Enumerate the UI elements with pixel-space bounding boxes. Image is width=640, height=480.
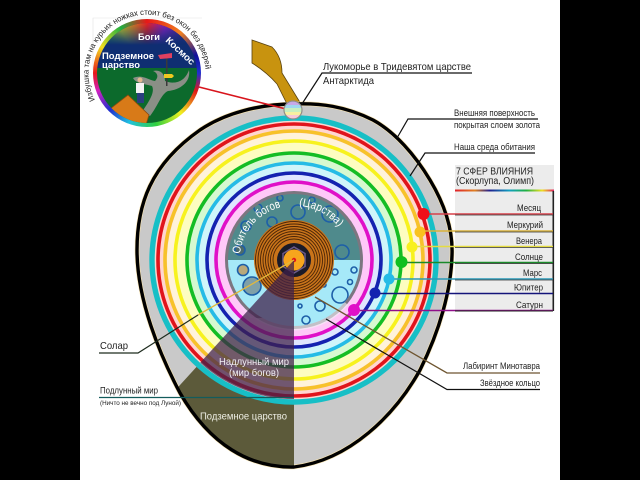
habitat callout: Наша среда обитания (454, 142, 535, 152)
curved disc caption: (Царства) (300, 198, 344, 227)
gray tree (133, 70, 189, 116)
rainbow rule (455, 190, 554, 192)
sphere leader lines and dots (348, 203, 553, 316)
tiny striped marker (284, 101, 302, 119)
inset circle: hut on chicken legs (84, 10, 212, 127)
Saturn row: Сатурн (516, 300, 543, 311)
outer surface callout: покрытая слоем золота (454, 120, 540, 130)
Jupiter row (370, 282, 553, 298)
Lukomorye callout: Антарктида (323, 75, 374, 87)
Moon row (418, 203, 553, 220)
sublunar caption: (Ничто не вечно под Луной) (100, 399, 181, 407)
sphere table panel (455, 165, 554, 311)
Saturn row (348, 300, 553, 316)
inset labels: царство (102, 60, 140, 71)
Lukomorye callout (300, 61, 472, 107)
bubbles (235, 195, 357, 324)
page background (80, 0, 560, 480)
inset labels: Космос (163, 35, 197, 68)
inset labels: Подземное (102, 51, 154, 62)
red connector to inset (199, 87, 290, 110)
Mars row: Марс (523, 268, 542, 279)
table heading (456, 166, 534, 187)
Mars row (384, 268, 553, 284)
figure (136, 78, 144, 103)
inset labels (102, 32, 197, 71)
Lukomorye callout: Лукоморье в Тридевятом царстве (323, 61, 471, 73)
wedge captions (219, 356, 289, 379)
curved disc caption (232, 198, 344, 253)
Mercury row: Меркурий (507, 220, 543, 231)
wooden hut (111, 94, 150, 123)
wedge captions: (мир богов) (229, 367, 279, 379)
star ring callout: Звёздное кольцо (480, 378, 540, 388)
sublunar caption: Подлунный мир (100, 386, 158, 396)
Sun row (396, 252, 553, 268)
underground olive region (178, 367, 294, 466)
underground caption: Подземное царство (200, 410, 287, 422)
Sun row: Солнце (515, 252, 543, 263)
concentric sphere rings (152, 118, 436, 402)
copper labyrinth coil (254, 220, 334, 300)
solar callout (99, 260, 294, 353)
wedge captions: Надлунный мир (219, 356, 289, 368)
Venus row: Венера (516, 236, 543, 247)
table heading: 7 СФЕР ВЛИЯНИЯ (456, 166, 533, 178)
signpost (158, 53, 174, 86)
lunar line (99, 386, 294, 407)
Venus row (406, 236, 553, 252)
outer surface callout (397, 108, 540, 138)
curved inset caption: Избушка там на курьих ножках стоит без окон без дверей (84, 10, 212, 102)
solar core (277, 243, 311, 277)
curved disc caption: Обитель богов (232, 202, 280, 253)
minotaur labyrinth callout: Лабиринт Минотавра (463, 361, 540, 371)
Jupiter row: Юпитер (514, 282, 543, 294)
Mercury row (414, 220, 553, 238)
outer surface callout: Внешняя поверхность (454, 108, 535, 118)
upper lunar wedge overlay (200, 260, 294, 399)
solar callout: Солар (100, 340, 128, 352)
inset labels: Боги (138, 32, 160, 43)
rainbow rim (93, 19, 201, 127)
star ring callout (326, 319, 540, 390)
faint inset frame (93, 18, 202, 70)
table heading: (Скорлупа, Олимп) (456, 176, 534, 187)
inner disc: abode of the gods (225, 191, 363, 330)
apple body (137, 104, 452, 480)
inset scene (97, 23, 197, 128)
Moon row: Месяц (517, 203, 541, 214)
habitat callout (410, 142, 535, 176)
sublunar caption (100, 386, 181, 407)
minotaur labyrinth callout (315, 297, 540, 373)
golden stem (252, 40, 301, 104)
